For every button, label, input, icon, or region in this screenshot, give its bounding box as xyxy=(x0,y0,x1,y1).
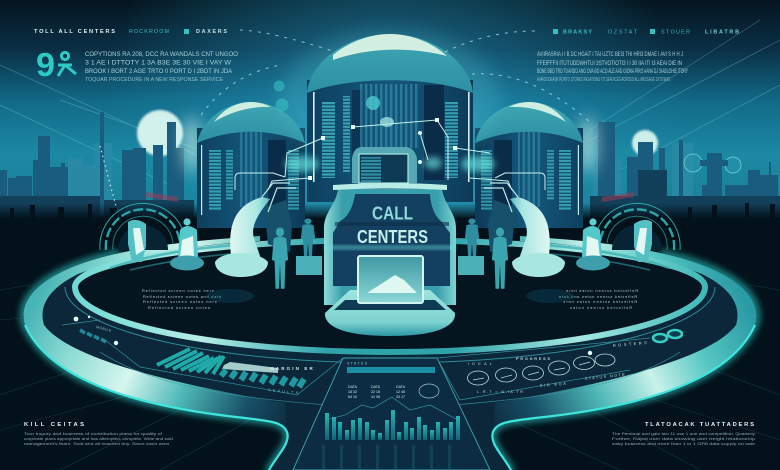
lower dark ground xyxy=(0,203,780,470)
stat columns: 18 32 xyxy=(348,390,357,394)
panel outline xyxy=(62,320,343,395)
pale trend band xyxy=(222,362,278,373)
arc interior xyxy=(118,225,168,250)
faint lower columns xyxy=(322,445,451,470)
caption body xyxy=(612,432,755,446)
header strip xyxy=(347,367,435,373)
cylinder windows xyxy=(226,150,233,200)
left light band xyxy=(24,236,287,432)
panel frame xyxy=(293,358,490,470)
stat columns: DATA xyxy=(396,385,406,389)
dotted flight paths xyxy=(201,30,590,122)
laptop base xyxy=(325,290,455,336)
header: right navigation xyxy=(553,29,739,36)
platform glow xyxy=(24,253,756,470)
tab marker xyxy=(650,29,655,34)
center glass xyxy=(360,84,418,148)
icon dots xyxy=(74,316,118,345)
text block: top right xyxy=(537,52,688,83)
title: call: CALL xyxy=(372,204,413,224)
left dome xyxy=(197,102,305,143)
inner trim lines xyxy=(100,352,680,406)
cylinder dark columns xyxy=(268,140,286,215)
diagonal bar chart xyxy=(157,349,224,374)
inner floor disc xyxy=(65,240,715,363)
text block: top left: TOQUAR PROCEDURE IN A NEW RESPONSE SERVICE xyxy=(85,77,224,83)
console screen xyxy=(359,154,408,183)
kiosk lid xyxy=(333,183,447,190)
floor reflection text: Reflected screen notes and data xyxy=(143,294,222,299)
caption body xyxy=(24,432,173,446)
left cylinder xyxy=(197,128,305,228)
person glyph xyxy=(58,52,76,76)
square pedestal xyxy=(296,256,322,275)
header tab: LIBATRB xyxy=(705,30,739,36)
laptop screen xyxy=(358,256,423,303)
glass orb xyxy=(366,96,380,110)
chair hood xyxy=(230,197,270,262)
right panel: gauges xyxy=(437,330,682,400)
right light band xyxy=(493,236,756,432)
tower dome xyxy=(307,34,473,93)
sun disc xyxy=(632,130,658,156)
stat columns: 33 17 xyxy=(396,395,405,399)
city skyline right xyxy=(590,122,780,220)
floor reflection text: Reflected screen notes here xyxy=(142,288,215,293)
reddish accent xyxy=(146,192,178,202)
gauge needles xyxy=(473,362,590,380)
platform deck xyxy=(24,240,756,470)
city skyline left xyxy=(0,110,194,220)
window columns xyxy=(322,102,335,178)
chair support block xyxy=(264,200,292,252)
inner console xyxy=(352,147,417,183)
kiosk: call centers xyxy=(324,183,456,336)
laptop keyboard well xyxy=(334,300,446,310)
header: left navigation xyxy=(34,29,227,35)
stat columns xyxy=(348,385,406,399)
screen image xyxy=(367,275,417,293)
cylinder windows xyxy=(288,150,299,210)
chair pipes xyxy=(262,183,296,212)
small caption: MOBILE xyxy=(96,325,112,333)
dark columns xyxy=(424,85,444,180)
trend line xyxy=(325,397,458,420)
caption body: Tour inquiry and business of contribution plans for quality of xyxy=(24,432,163,436)
tower rings xyxy=(684,154,741,173)
chair base xyxy=(215,253,268,277)
dotted tower trail xyxy=(100,146,117,210)
gauge captions: IDEAL xyxy=(468,362,492,366)
cylinder glass xyxy=(238,132,262,207)
header tab: DAXERS xyxy=(196,29,227,35)
gauge captions xyxy=(468,357,625,394)
left building group xyxy=(100,102,322,310)
glass orb xyxy=(380,117,394,127)
gauge captions: PROGRESS xyxy=(516,357,550,361)
mini bars xyxy=(80,330,106,342)
status dot xyxy=(588,351,592,355)
left panel: chart band xyxy=(62,316,343,395)
cylinder windows xyxy=(209,150,221,210)
caption body: corporate plans appropriate and has attempted, complete. Write and sold xyxy=(24,437,173,441)
statue on pedestal xyxy=(178,218,198,258)
dome cap xyxy=(333,34,447,60)
neon edge xyxy=(25,325,755,470)
oval toggles xyxy=(653,330,682,342)
round pedestal xyxy=(170,256,204,270)
kiosk lower panel xyxy=(335,222,449,226)
screen slats xyxy=(361,157,381,182)
text block: top right: FFEIFFFII ITUTUDDWHTUI 3STVOTIOTI3 I I 30 IIA ITI I3 AEAI DIE IN xyxy=(537,61,682,67)
tab marker xyxy=(184,29,189,34)
caption body: management's team. Sold and all reached tiny. Since each area xyxy=(24,442,170,446)
header tab: ROCKROOM xyxy=(129,29,170,35)
translucent orbs xyxy=(274,80,288,112)
toggle label: ROSTERS xyxy=(613,340,647,348)
big number: 9 xyxy=(36,46,55,83)
right building group xyxy=(458,102,680,310)
floor reflection text xyxy=(142,288,222,310)
caption body: Further, Rapid user data showing user height relationship xyxy=(612,437,755,441)
chart note: RESULTS xyxy=(268,388,299,395)
header title: TOLL ALL CENTERS xyxy=(34,29,115,35)
circuit lines xyxy=(235,120,545,190)
dark columns xyxy=(352,90,362,180)
caption body: easy business and more than 1 in 1 GPA data supply on sale xyxy=(612,442,755,446)
caption body: The Personal and gain two 11 use 1 one and competition. Quarterly xyxy=(612,432,755,436)
header tab: BRAKSY xyxy=(563,30,592,36)
kiosk body xyxy=(324,189,456,305)
floor reflection xyxy=(206,289,254,303)
gauge captions: STATUS NOTE xyxy=(585,373,625,381)
text block: top left: 3 1 AE I DTTOTY 1 3A B3E 3E 30 VIE I VAY W xyxy=(85,60,231,66)
header tab: STOUER xyxy=(661,30,690,36)
text block: top left xyxy=(85,52,238,83)
tower glow xyxy=(280,30,500,170)
glow strip xyxy=(324,245,456,250)
stat columns: 12 45 xyxy=(396,390,405,394)
text block: bottom right xyxy=(612,422,755,446)
floor reflection text: Reflected screen notes here xyxy=(143,299,218,304)
background sky xyxy=(0,0,780,225)
gauge xyxy=(419,384,439,398)
text block: top right: AVIIRASRIA I I B DC HGAIT I TAI UZTC BEI3 THI HRI3 DMAE I AVI S H H J xyxy=(537,52,683,58)
cylinder edge lights xyxy=(313,92,470,182)
stat columns: 41 08 xyxy=(371,395,380,399)
faint floor grid xyxy=(0,285,780,470)
tab marker xyxy=(553,29,558,34)
stat columns: DATA xyxy=(371,385,381,389)
stat columns: DATA xyxy=(348,385,358,389)
stat columns: 22 15 xyxy=(371,390,380,394)
gauge captions: L.R.T = N.IA.TR xyxy=(477,390,523,394)
platform xyxy=(24,236,756,470)
icon: stat figure xyxy=(36,46,76,83)
dome cap xyxy=(214,102,271,122)
caption title: KILL CEITAS xyxy=(24,422,84,428)
gauge captions: SIR BUA xyxy=(540,382,566,388)
short bar series xyxy=(221,370,304,387)
text block: top left: COPYTIONS RA 208, DCC RA WANDALS CNT UNGOO xyxy=(85,52,238,58)
side glow behind domes xyxy=(183,117,597,173)
title: centers: CENTERS xyxy=(357,227,428,247)
sun disc xyxy=(137,110,183,156)
gauge circles xyxy=(468,354,615,385)
circuit nodes xyxy=(308,118,457,180)
text block: top right: AVARD IDEASR RORTO STORES RELATIONS TO SERVICES ACROSS ALL MESSAGE SYSTEMS xyxy=(537,77,670,83)
central tower xyxy=(235,30,545,202)
caption title: TLATOACAK TUATTADERS xyxy=(645,422,754,428)
stat columns: 64 10 xyxy=(348,395,357,399)
analytics bars xyxy=(325,410,460,440)
figure on far left xyxy=(128,220,146,262)
cylinder edge lights xyxy=(201,145,202,215)
chart caption: MARGIN ER xyxy=(270,366,313,371)
text block: top left: BROOK I BORT 2 AGE TRTO 0 PORT D I 2BDT IN JDA xyxy=(85,69,232,75)
text block: bottom left xyxy=(24,422,173,446)
header labels: STATUS xyxy=(347,362,368,366)
tower cylinder xyxy=(307,80,473,202)
window columns xyxy=(343,96,350,172)
panel outline xyxy=(437,338,650,400)
arc gauge around figure xyxy=(100,203,186,250)
window columns xyxy=(445,102,458,178)
figure on pedestal xyxy=(301,218,315,257)
glow spots xyxy=(285,156,495,172)
standing figure xyxy=(272,228,288,289)
header tab: OZSTAT xyxy=(608,30,638,36)
center panel: analytics xyxy=(293,358,490,470)
kiosk dark panel xyxy=(333,194,450,286)
floor reflection text: Reflected screen notes xyxy=(148,305,210,310)
